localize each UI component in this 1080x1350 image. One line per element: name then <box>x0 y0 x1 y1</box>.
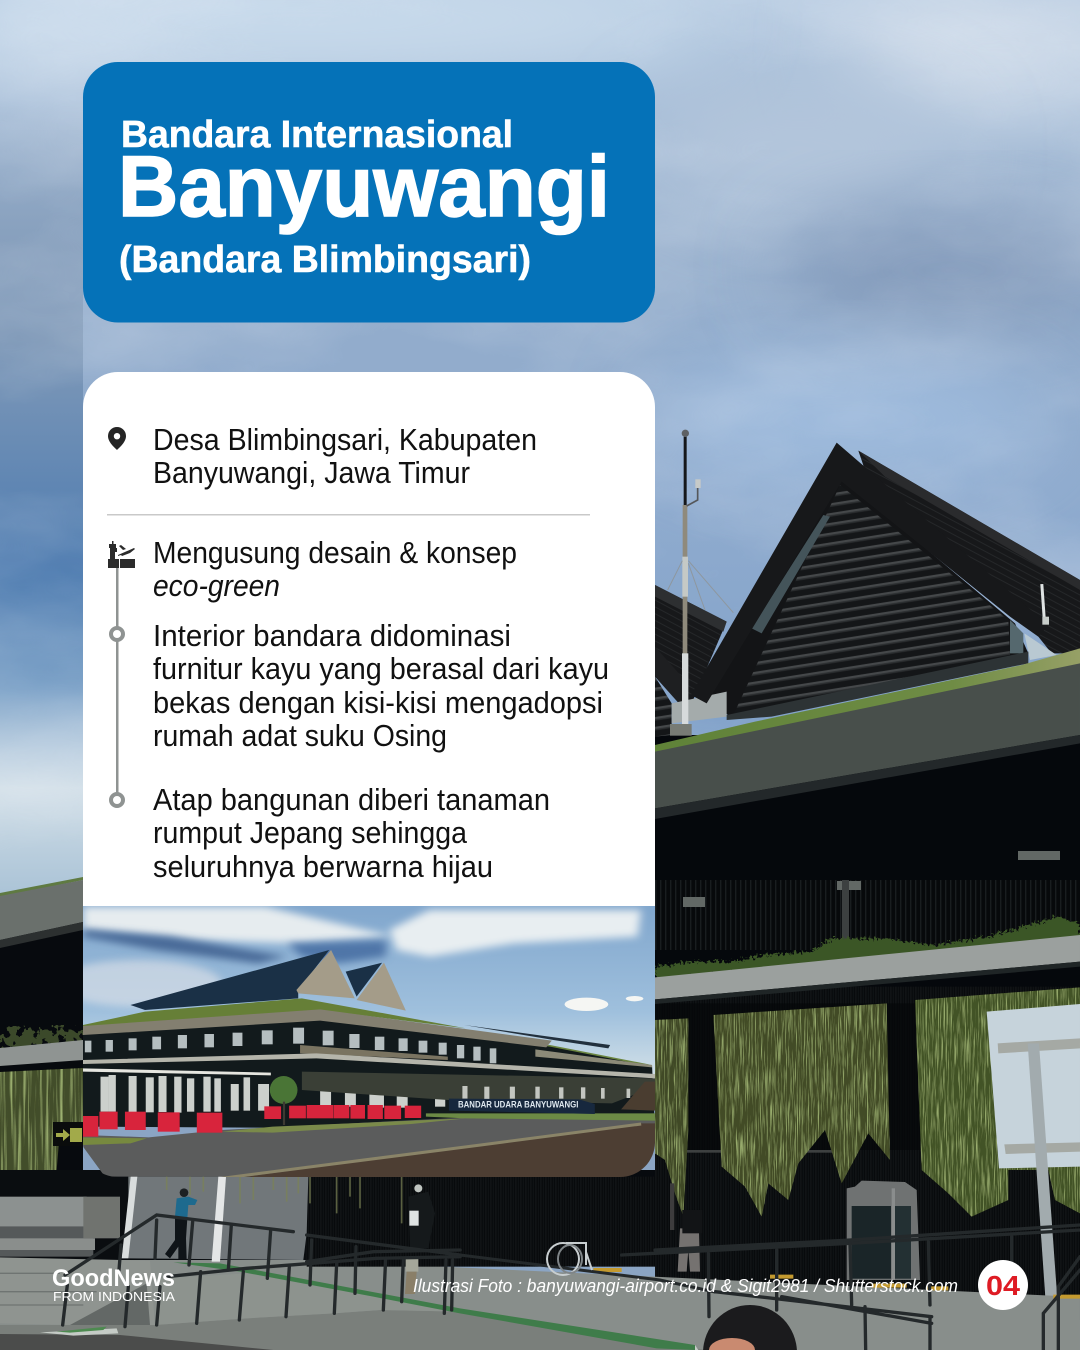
upper gallery fence and small fixtures <box>655 851 1080 950</box>
photo roof <box>130 950 329 1010</box>
green roof grass <box>655 648 1080 752</box>
person in blue shirt <box>165 1188 197 1259</box>
footer logo: GoodNews from Indonesia: GoodNews <box>52 1265 175 1292</box>
green roof text: Atap bangunan diberi tanaman <box>153 782 550 817</box>
outdoor AC unit <box>847 1181 920 1280</box>
wheelchair <box>547 1243 592 1275</box>
photo tree <box>270 1076 298 1125</box>
photo windows <box>85 1028 496 1063</box>
location text: Desa Blimbingsari, Kabupaten <box>153 422 537 457</box>
location text: Banyuwangi, Jawa Timur <box>153 455 470 490</box>
photo red barriers <box>83 1105 421 1137</box>
footer logo: GoodNews from Indonesia <box>52 1265 176 1304</box>
road <box>0 1334 273 1350</box>
eco-green text: eco-green <box>153 568 280 603</box>
photo gazebo <box>621 1082 655 1111</box>
inset photo: terminal exterior <box>54 900 655 1180</box>
eco-green text: Mengusung desain & konsep <box>153 535 517 570</box>
distant person <box>405 1258 418 1294</box>
planter slab <box>655 935 1080 999</box>
hanging vine strands under photo <box>167 1177 402 1223</box>
interior text: furnitur kayu yang berasal dari kayu <box>153 651 609 686</box>
ground, ramps and stairs <box>0 1257 1080 1350</box>
green lane <box>173 1262 695 1350</box>
left wing of terminal <box>0 877 83 1195</box>
interior text: rumah adat suku Osing <box>153 718 447 753</box>
yellow curbs <box>593 1270 1080 1297</box>
hanging vines <box>655 987 1080 1217</box>
person in hijab at bottom edge <box>703 1305 797 1350</box>
wall and stairs under photo <box>0 1170 670 1325</box>
green roof text: seluruhnya berwarna hijau <box>153 849 493 884</box>
planter bushes <box>655 917 1080 980</box>
sky with clouds <box>0 0 1080 1000</box>
photo credit: Ilustrasi Foto : banyuwangi-airport.co.id & Sigit2981 / Shutterstock.com <box>413 1276 958 1296</box>
grey upper deck <box>0 1257 1080 1350</box>
weather mast <box>668 430 733 736</box>
signboard back and post <box>987 1004 1080 1350</box>
title line 3: (Bandara Blimbingsari) <box>119 239 531 281</box>
black fascia of gable <box>691 443 1048 703</box>
interior text: bekas dengan kisi-kisi mengadopsi <box>153 685 603 720</box>
icon: location pin <box>108 427 126 450</box>
page number badge <box>978 1260 1028 1310</box>
railings <box>63 1215 1080 1350</box>
icon: airport tower and plane <box>108 541 135 568</box>
green roof text <box>153 782 550 884</box>
panel: information card <box>83 372 655 907</box>
title panel <box>83 62 655 322</box>
lower facade, vines and sign <box>655 917 1080 1350</box>
photo clouds <box>54 907 643 1011</box>
photo green roof <box>83 998 466 1028</box>
person with white bag <box>408 1184 435 1248</box>
photo columns <box>101 1075 445 1113</box>
main gable roof and rooftop <box>655 430 1080 819</box>
eco-green text <box>153 535 517 603</box>
page number badge: 04 <box>986 1270 1020 1301</box>
lower ramp <box>0 1310 707 1350</box>
green roof text: rumput Jepang sehingga <box>153 815 468 850</box>
person silhouette <box>655 1183 702 1272</box>
footer logo: GoodNews from Indonesia: FROM INDONESIA <box>53 1290 176 1304</box>
photo lawn and road <box>83 1113 655 1177</box>
back gable <box>655 585 727 737</box>
interior text <box>153 618 609 753</box>
location text <box>153 422 537 490</box>
interior text: Interior bandara didominasi <box>153 618 511 653</box>
title line 1: Bandara Internasional <box>121 114 513 156</box>
title main name: Banyuwangi <box>118 139 610 235</box>
photo facade <box>83 1020 655 1130</box>
photo signboard: BANDAR UDARA BANYUWANGI <box>458 1099 578 1109</box>
photo signboard <box>449 1099 595 1114</box>
timeline line and markers <box>111 568 123 806</box>
ramp wall <box>155 1273 460 1325</box>
concrete slab <box>655 663 1080 808</box>
icon: airport direction sign <box>53 1122 83 1146</box>
dark lower facade <box>0 735 1080 1305</box>
